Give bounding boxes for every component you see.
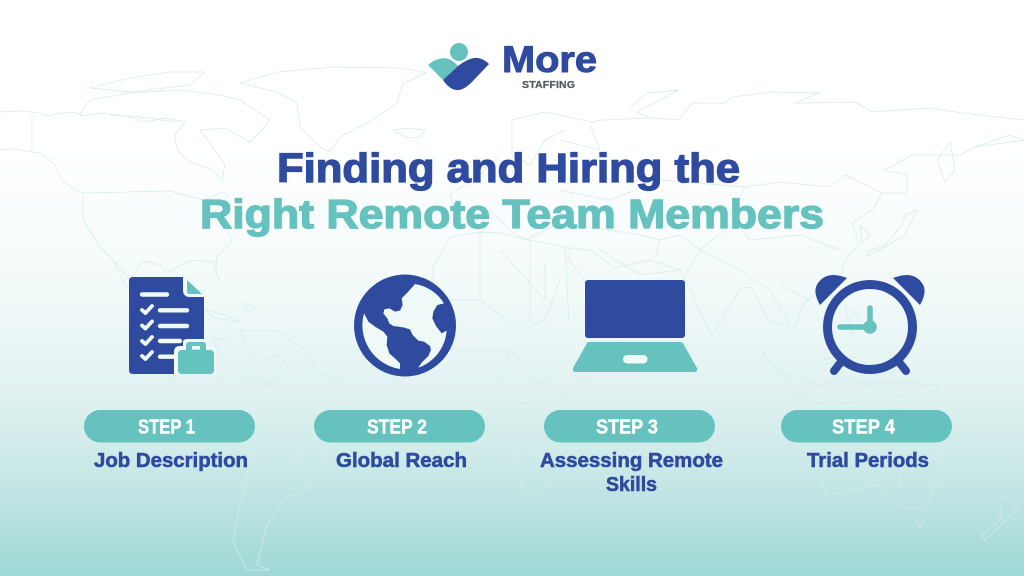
logo <box>428 39 597 91</box>
step 4 badge: STEP 4 <box>832 416 896 438</box>
step 3 label: Skills <box>606 473 657 496</box>
icon: laptop <box>573 280 697 372</box>
logo tagline: STAFFING <box>522 79 575 91</box>
icon: globe <box>354 274 456 376</box>
icon: document with briefcase <box>129 277 216 374</box>
step 2 badge: STEP 2 <box>367 416 427 438</box>
step 4 label: Trial Periods <box>807 449 929 472</box>
icon: alarm clock <box>815 275 925 371</box>
step 3 label: Assessing Remote <box>540 449 723 472</box>
title: Finding and Hiring the <box>277 145 740 191</box>
step 2 <box>314 410 485 472</box>
logo wordmark: More <box>502 39 597 80</box>
step 3 label <box>540 449 723 496</box>
step 2 badge <box>314 410 485 442</box>
step 1 label: Job Description <box>94 449 248 472</box>
logo mark <box>428 43 489 90</box>
step 2 label: Global Reach <box>336 449 467 472</box>
step 4 badge <box>781 410 952 442</box>
step 1 badge: STEP 1 <box>138 416 195 438</box>
step 3 badge: STEP 3 <box>596 416 658 438</box>
step 3 badge <box>544 410 715 442</box>
step 4 <box>781 410 952 472</box>
title: Right Remote Team Members <box>200 191 824 237</box>
title <box>200 145 824 237</box>
step 1 badge <box>84 410 255 442</box>
step 1 <box>84 410 255 472</box>
step 3 <box>540 410 723 496</box>
